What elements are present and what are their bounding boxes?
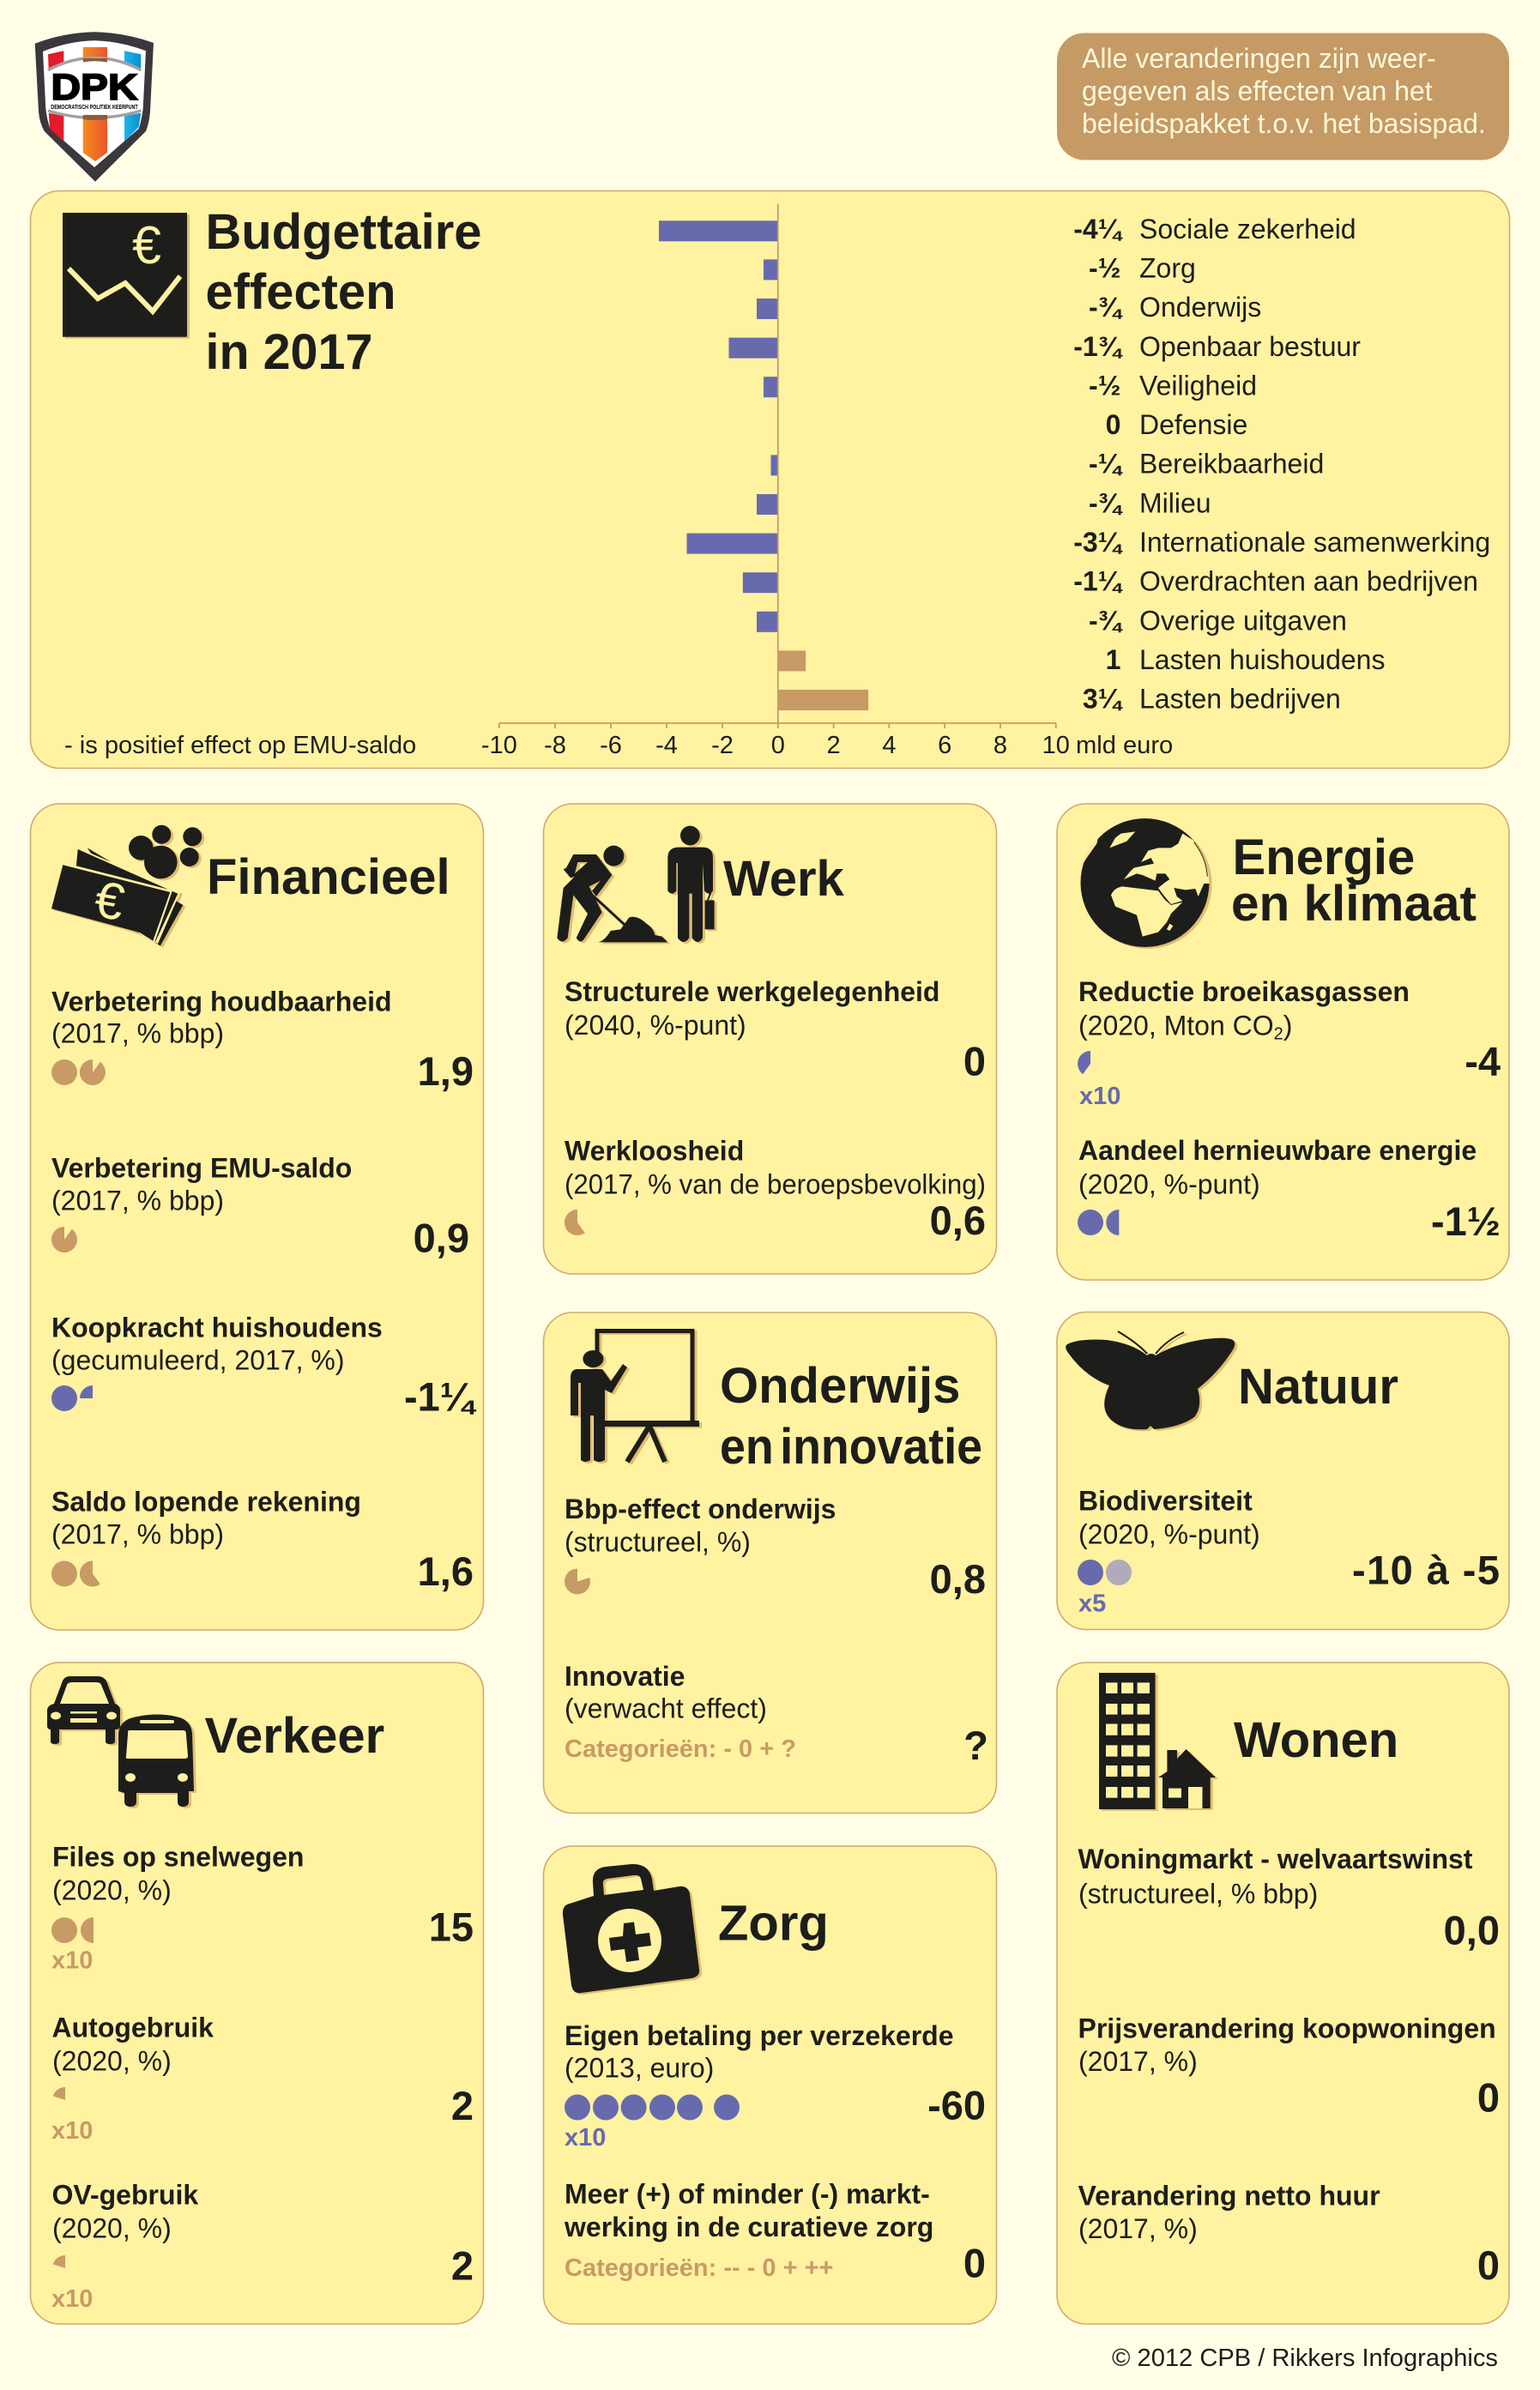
metric: structurele werkgelegenheid: Structurele werkgelegenheid: [565, 976, 939, 1007]
panel: zorg: [544, 1846, 997, 2324]
value and category list: Internationale samenwerking: [1139, 527, 1490, 558]
icon: euro chart: [63, 213, 187, 337]
icon: building and house: [1099, 1673, 1216, 1809]
icon: globe: [1072, 815, 1212, 947]
value and category list: 3¼: [1083, 684, 1123, 715]
metric: OV-gebruik: (2020, %): [52, 2213, 172, 2244]
metric: aandeel hernieuwbare energie: -1½: [1431, 1198, 1501, 1244]
metric: woningmarkt: 0,0: [1444, 1908, 1500, 1952]
metric: verbetering houdbaarheid: Verbetering houdbaarheid: [51, 987, 392, 1017]
value and category list: [1073, 214, 1490, 715]
metric: werkloosheid: Werkloosheid: [565, 1136, 744, 1167]
metric: werkloosheid: (2017, % van de beroepsbevolking): [565, 1168, 986, 1199]
icon: first aid kit: [563, 1864, 699, 1993]
callout: uitleg: Alle veranderingen zijn weer-: [1082, 43, 1436, 74]
heading: Verkeer: [204, 1708, 384, 1764]
metric: autogebruik: [51, 2013, 474, 2145]
metric: eigen betaling: -60: [927, 2083, 986, 2127]
metric: innovatie: Innovatie: [565, 1661, 685, 1692]
metric: koopkracht huishoudens: [51, 1313, 477, 1419]
value and category list: Onderwijs: [1139, 292, 1261, 323]
metric: marktwerking: 0: [963, 2241, 986, 2285]
heading: budgettaire effecten in 2017: effecten: [206, 264, 396, 320]
bar chart: 4: [882, 732, 896, 759]
metric: reductie broeikasgassen: 2: [1274, 1024, 1283, 1043]
value and category list: -¾: [1089, 605, 1123, 636]
bar chart: -4: [655, 732, 678, 759]
metric: koopkracht huishoudens: (gecumuleerd, 2017, %): [51, 1345, 345, 1376]
metric: saldo lopende rekening: [51, 1486, 474, 1594]
metric: eigen betaling: x10: [565, 2124, 606, 2152]
metric: prijsverandering koopwoningen: [1078, 2013, 1500, 2121]
metric: autogebruik: 2: [451, 2083, 474, 2128]
metric: aandeel hernieuwbare energie: (2020, %-punt): [1078, 1168, 1260, 1199]
logo: DPK shield: DPK: [51, 67, 137, 108]
callout: uitleg: [1057, 33, 1509, 160]
heading: Zorg: [718, 1896, 829, 1951]
value and category list: Veiligheid: [1139, 370, 1257, 401]
bar chart: 6: [938, 732, 951, 759]
metric: marktwerking: werking in de curatieve zorg: [564, 2212, 933, 2242]
metric: OV-gebruik: [51, 2179, 474, 2313]
metric: reductie broeikasgassen: [1078, 976, 1501, 1110]
metric: saldo lopende rekening: Saldo lopende rekening: [51, 1486, 361, 1517]
metric: OV-gebruik: 2: [451, 2242, 474, 2289]
metric: autogebruik: Autogebruik: [51, 2013, 214, 2043]
metric: woningmarkt: (structureel, % bbp): [1078, 1879, 1318, 1910]
metric: eigen betaling: (2013, euro): [565, 2052, 714, 2083]
heading: Wonen: [1234, 1712, 1398, 1768]
metric: eigen betaling: [565, 2020, 986, 2152]
metric: prijsverandering koopwoningen: (2017, %): [1078, 2046, 1198, 2077]
heading: Onderwijs: [720, 1358, 960, 1414]
heading: en klimaat: [1231, 876, 1477, 932]
metric: reductie broeikasgassen: x10: [1079, 1083, 1120, 1110]
value and category list: -1¾: [1073, 331, 1123, 362]
panel: financieel: [31, 804, 484, 1630]
bar chart: -2: [711, 732, 734, 759]
bar chart: -6: [600, 732, 622, 759]
value and category list: Bereikbaarheid: [1139, 449, 1324, 480]
bar chart: 2: [827, 732, 841, 759]
value and category list: Openbaar bestuur: [1139, 331, 1361, 362]
metric: werkloosheid: [565, 1136, 986, 1243]
metric: verandering netto huur: Verandering netto huur: [1078, 2181, 1380, 2212]
metric: saldo lopende rekening: (2017, % bbp): [51, 1518, 224, 1549]
metric: biodiversiteit: Biodiversiteit: [1078, 1486, 1253, 1517]
metric: reductie broeikasgassen: ): [1283, 1011, 1292, 1041]
icon: businessman: [667, 826, 715, 942]
value and category list: -½: [1089, 370, 1120, 401]
metric: innovatie: ?: [963, 1723, 988, 1768]
heading: Financieel: [207, 849, 450, 905]
metric: verbetering EMU-saldo: Verbetering EMU-saldo: [51, 1153, 352, 1184]
value and category list: 1: [1106, 644, 1120, 675]
metric: reductie broeikasgassen: -4: [1465, 1038, 1501, 1084]
metric: marktwerking: [564, 2179, 986, 2285]
value and category list: -4¼: [1073, 214, 1123, 244]
metric: bbp-effect onderwijs: (structureel, %): [565, 1527, 751, 1558]
heading: budgettaire effecten in 2017: Budgettaire: [206, 204, 482, 260]
metric: eigen betaling: Eigen betaling per verzekerde: [565, 2020, 954, 2051]
footnote: - is positief effect op EMU-saldo: [64, 732, 416, 759]
bar chart: -8: [544, 732, 566, 759]
bar chart: 10: [1042, 732, 1070, 759]
heading: Natuur: [1238, 1359, 1398, 1415]
value and category list: Zorg: [1139, 252, 1196, 283]
metric: biodiversiteit: [1078, 1486, 1500, 1618]
icon: money: €: [90, 870, 129, 932]
metric: bbp-effect onderwijs: 0,8: [930, 1556, 986, 1602]
value and category list: -¾: [1089, 292, 1123, 323]
metric: reductie broeikasgassen: Reductie broeikasgassen: [1078, 976, 1410, 1007]
metric: koopkracht huishoudens: Koopkracht huishoudens: [51, 1313, 383, 1343]
metric: autogebruik: (2020, %): [52, 2045, 172, 2076]
value and category list: Overdrachten aan bedrijven: [1139, 566, 1478, 597]
icon: digging worker: [557, 846, 667, 942]
icon: bus: [118, 1714, 194, 1807]
metric: innovatie: [565, 1661, 988, 1768]
value and category list: Lasten huishoudens: [1139, 644, 1385, 675]
bar chart: 8: [993, 732, 1007, 759]
metric: files op snelwegen: Files op snelwegen: [52, 1841, 304, 1872]
value and category list: Milieu: [1139, 487, 1211, 518]
panel: natuur: [1057, 1313, 1509, 1630]
metric: aandeel hernieuwbare energie: [1078, 1135, 1501, 1244]
metric: files op snelwegen: x10: [51, 1947, 93, 1975]
metric: verandering netto huur: 0: [1477, 2242, 1500, 2288]
heading: [1231, 830, 1477, 932]
metric: marktwerking: Categorieën: -- - 0 + ++: [565, 2254, 833, 2282]
heading: en innovatie: [720, 1419, 982, 1475]
metric: marktwerking: Meer (+) of minder (-) markt-: [565, 2179, 930, 2210]
metric: verbetering EMU-saldo: 0,9: [414, 1215, 469, 1261]
logo: DPK shield: DEMOCRATISCH POLITIEK KEERPUNT: [51, 103, 138, 111]
icon: money: [51, 825, 202, 946]
metric: saldo lopende rekening: 1,6: [418, 1548, 474, 1594]
value and category list: -1¼: [1073, 566, 1123, 597]
bar chart: mld euro: [1076, 732, 1173, 759]
value and category list: -½: [1089, 252, 1120, 283]
metric: koopkracht huishoudens: -1¼: [404, 1374, 477, 1419]
panel: budgettaire effecten: [31, 190, 1510, 769]
icon: euro chart: €: [132, 216, 161, 275]
metric: biodiversiteit: x5: [1078, 1590, 1106, 1618]
metric: bbp-effect onderwijs: [565, 1494, 986, 1602]
panel: verkeer: [31, 1663, 484, 2324]
metric: files op snelwegen: 15: [429, 1904, 474, 1949]
icon: butterfly: [1066, 1331, 1235, 1429]
metric: structurele werkgelegenheid: 0: [963, 1038, 986, 1084]
metric: verbetering houdbaarheid: (2017, % bbp): [51, 1017, 224, 1048]
bar chart: [481, 204, 1173, 759]
metric: verbetering EMU-saldo: (2017, % bbp): [51, 1186, 224, 1216]
value and category list: Lasten bedrijven: [1139, 684, 1341, 715]
icon: car: [47, 1676, 120, 1744]
panel: onderwijs en innovatie: [544, 1313, 997, 1814]
metric: woningmarkt: [1078, 1844, 1500, 1952]
heading: Werk: [723, 851, 845, 907]
metric: innovatie: (verwacht effect): [565, 1693, 767, 1724]
logo: DPK shield: [35, 32, 154, 182]
bar chart: 0: [771, 732, 785, 759]
metric: prijsverandering koopwoningen: Prijsverandering koopwoningen: [1078, 2013, 1496, 2043]
panel: wonen: [1057, 1663, 1509, 2324]
panel: werk: [544, 804, 997, 1274]
metric: werkloosheid: 0,6: [930, 1198, 986, 1243]
value and category list: -¾: [1089, 487, 1123, 518]
metric: reductie broeikasgassen: (2020, Mton CO: [1078, 1011, 1274, 1041]
panel: energie en klimaat: [1057, 804, 1509, 1280]
value and category list: Overige uitgaven: [1139, 605, 1347, 636]
metric: OV-gebruik: OV-gebruik: [51, 2179, 198, 2210]
metric: verandering netto huur: [1078, 2181, 1500, 2288]
metric: bbp-effect onderwijs: Bbp-effect onderwijs: [565, 1494, 836, 1524]
value and category list: -3¼: [1073, 527, 1123, 558]
callout: uitleg: beleidspakket t.o.v. het basispad.: [1082, 108, 1486, 139]
heading: budgettaire effecten in 2017: in 2017: [206, 324, 372, 380]
value and category list: Sociale zekerheid: [1139, 214, 1356, 244]
metric: innovatie: Categorieën: - 0 + ?: [565, 1735, 796, 1763]
metric: aandeel hernieuwbare energie: Aandeel hernieuwbare energie: [1078, 1135, 1477, 1166]
metric: files op snelwegen: (2020, %): [52, 1875, 172, 1906]
heading: [720, 1358, 982, 1475]
metric: woningmarkt: Woningmarkt - welvaartswinst: [1078, 1844, 1473, 1874]
bar chart: -10: [481, 732, 517, 759]
heading: Energie: [1232, 830, 1415, 885]
metric: structurele werkgelegenheid: [565, 976, 986, 1084]
metric: prijsverandering koopwoningen: 0: [1477, 2074, 1500, 2121]
copyright: © 2012 CPB / Rikkers Infographics: [1112, 2345, 1498, 2372]
metric: biodiversiteit: -10 à -5: [1352, 1548, 1500, 1592]
metric: files op snelwegen: [51, 1841, 474, 1975]
metric: verbetering EMU-saldo: [51, 1153, 469, 1261]
metric: verandering netto huur: (2017, %): [1078, 2213, 1198, 2244]
metric: verbetering houdbaarheid: 1,9: [418, 1048, 474, 1094]
callout: uitleg: gegeven als effecten van het: [1082, 75, 1433, 106]
heading: budgettaire effecten in 2017: [206, 204, 482, 380]
icon: teacher at board: [571, 1331, 699, 1462]
value and category list: Defensie: [1139, 409, 1247, 440]
metric: structurele werkgelegenheid: (2040, %-punt): [565, 1010, 746, 1041]
metric: autogebruik: x10: [51, 2117, 93, 2145]
metric: biodiversiteit: (2020, %-punt): [1078, 1518, 1260, 1549]
metric: verbetering houdbaarheid: [51, 987, 474, 1094]
value and category list: 0: [1106, 409, 1120, 440]
value and category list: -¼: [1089, 449, 1123, 480]
metric: OV-gebruik: x10: [51, 2285, 93, 2313]
